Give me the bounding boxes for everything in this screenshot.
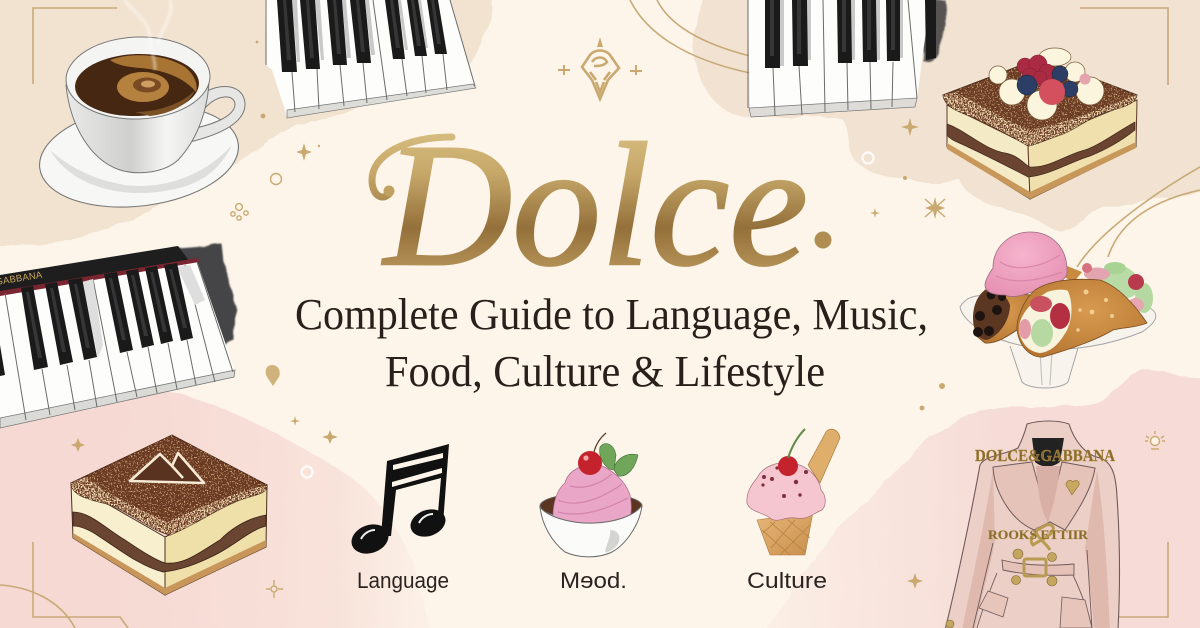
cannoli on glass dish (960, 232, 1156, 388)
cup body (66, 80, 209, 173)
gold arcs top centre (630, 0, 750, 73)
sponge left face (71, 483, 165, 595)
white ring charms (302, 152, 874, 478)
gold heart brooch (1066, 480, 1079, 495)
piano keys top right (748, 0, 946, 117)
pink wash bottom left (0, 392, 432, 628)
subtitle line one: Complete Guide to Language, Music, (295, 290, 928, 339)
leaves (600, 444, 638, 476)
left note head (347, 519, 393, 559)
piano keys top left (265, 0, 476, 118)
whipped cream (989, 48, 1104, 120)
gold corner frame bottom right (1080, 542, 1168, 617)
beige wash top left (0, 0, 492, 247)
gold corner frame bottom left (0, 542, 128, 628)
black keys (765, 0, 936, 68)
biscuit base (947, 142, 1136, 199)
cherry (778, 456, 798, 476)
front lip (749, 98, 917, 117)
key shadows (292, 0, 428, 62)
shell dimples (1076, 290, 1114, 332)
grey key shading (82, 265, 205, 358)
tiramisu bottom left (71, 435, 267, 595)
label: Language: Language (357, 568, 449, 593)
sponge right face (165, 485, 267, 595)
gold corner frame top left (33, 8, 117, 84)
pockets (979, 591, 1092, 628)
gold arcs behind cannoli (1077, 167, 1200, 267)
chocolate layers (73, 512, 266, 572)
pink wash bottom right (760, 370, 1200, 628)
steam (125, 0, 171, 70)
top bar (0, 246, 190, 296)
label: Mood: Mɘod. (560, 568, 627, 593)
glass dish (960, 295, 1156, 349)
gold buttons (946, 549, 1057, 628)
raspberry (1017, 55, 1055, 85)
cocoa top (71, 435, 267, 535)
icon: crest emblem (558, 37, 642, 99)
chocolate cannolo (973, 290, 1031, 343)
back cannolo filling (1062, 259, 1153, 313)
sponge right face (1028, 100, 1137, 199)
dark smudge (170, 244, 235, 345)
ice cream swirl (553, 464, 631, 524)
gold safety pin (1031, 525, 1053, 550)
red felt (0, 258, 199, 296)
mountain logo (130, 453, 204, 483)
sleeve lines (973, 543, 1092, 628)
black keys (0, 263, 193, 376)
white keys (0, 261, 235, 419)
scoop (747, 463, 825, 520)
icon: ice cream bowl (540, 433, 642, 557)
cup handle (190, 87, 245, 142)
bowl body (540, 505, 642, 557)
white keys (748, 0, 930, 117)
lapels (993, 462, 1095, 530)
decorative sparkles and charms (71, 41, 945, 589)
pink scoop (985, 232, 1067, 297)
biscuit base (73, 533, 266, 595)
coat body (945, 421, 1119, 628)
pink dollop (1080, 74, 1090, 84)
stems and beams (381, 444, 449, 536)
illustration: trench coat (945, 421, 1119, 628)
cocoa top (943, 58, 1137, 146)
black keys (277, 0, 447, 72)
coffee (74, 52, 200, 118)
belt (1002, 560, 1074, 575)
key dividers (266, 0, 475, 112)
brand text: DOLCE&GABBANA (975, 446, 1116, 465)
label: Culture: Culture (747, 568, 827, 593)
tiramisu top right (943, 48, 1137, 199)
key dividers (748, 0, 917, 116)
front lip (0, 370, 235, 428)
cocoa speckle (71, 435, 267, 535)
right note head (407, 505, 449, 541)
gold corner frame top right (1080, 8, 1168, 85)
key shadows (780, 0, 903, 66)
neckline (1032, 438, 1064, 466)
icon: music note (347, 444, 449, 559)
blueberries (1017, 66, 1078, 97)
cup rim (65, 35, 211, 121)
main cannolo shell (1017, 279, 1147, 357)
saucer (34, 94, 244, 218)
wafer stick (808, 429, 840, 483)
cannolo filling (1019, 290, 1071, 353)
dark smudge (924, 0, 946, 62)
white keys (265, 0, 475, 118)
glass stem (1010, 346, 1078, 388)
waffle cone (757, 512, 813, 555)
keyboard left (0, 244, 235, 428)
front lip (287, 84, 476, 118)
red berry (1039, 79, 1065, 105)
sponge left face (947, 105, 1030, 199)
cherry (578, 451, 602, 475)
key dividers (5, 262, 233, 420)
cocoa light edge (71, 477, 267, 535)
cocoa light edge (943, 92, 1137, 146)
sleeve shading (962, 470, 1110, 628)
bowl rim back (540, 493, 642, 519)
chocolate layers (947, 122, 1135, 177)
icon: ice cream cone (747, 429, 840, 555)
collar text: ROOKS ETTIIR (988, 527, 1089, 542)
title: Dolce: Dolce (382, 108, 808, 303)
cocoa speckle (943, 58, 1137, 146)
small gold ring charms (231, 174, 1165, 598)
sprinkles (761, 466, 808, 498)
buckle (1024, 559, 1046, 576)
beige wash top right (694, 0, 1200, 230)
illustration: coffee cup (34, 35, 245, 218)
subtitle line two: Food, Culture & Lifestyle (385, 347, 825, 396)
